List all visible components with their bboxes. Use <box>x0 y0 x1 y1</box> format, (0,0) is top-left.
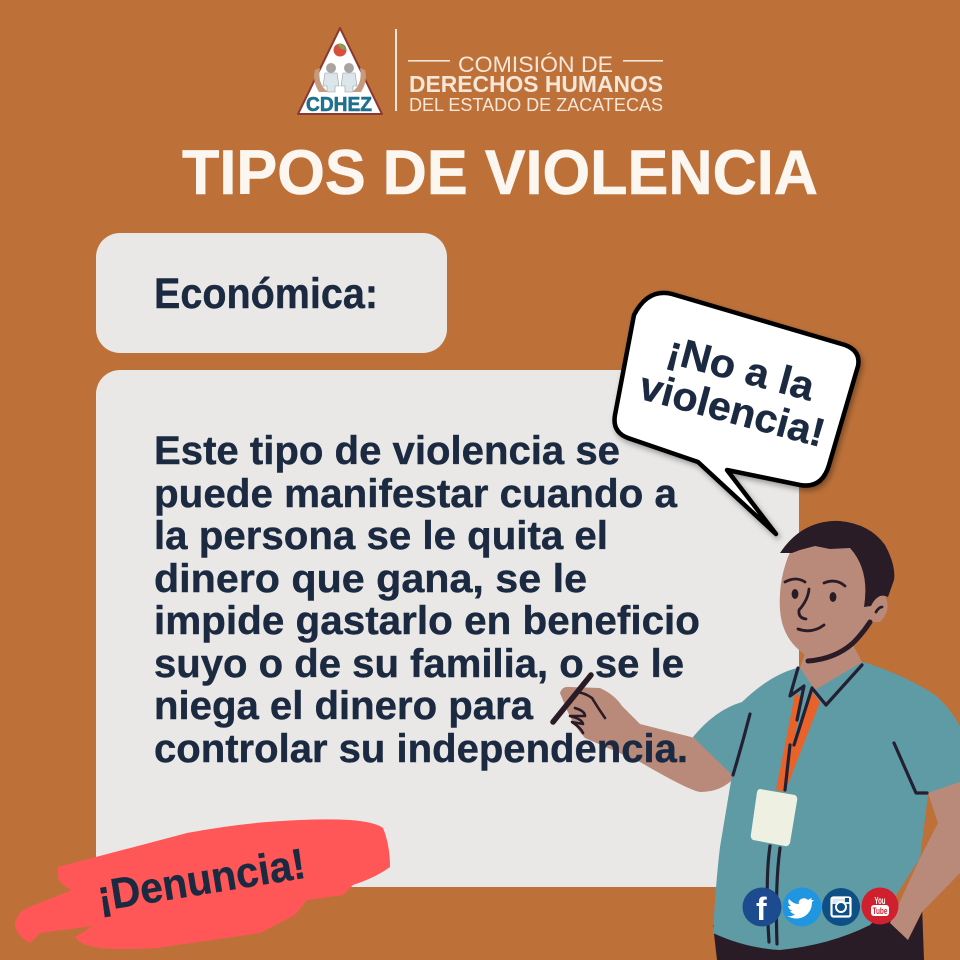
callout: denuncia brush <box>15 819 390 949</box>
heading: Económica: Económica: <box>154 270 378 318</box>
shirt lines <box>733 665 927 944</box>
bubble text: violencia! <box>635 364 830 456</box>
body text: controlar su independencia. <box>154 727 688 771</box>
logo: CDHEZ header <box>298 28 663 116</box>
body text: suyo o de su familia, o se le <box>154 642 684 686</box>
title: TIPOS DE VIOLENCIA <box>182 138 818 208</box>
institution name: DEL ESTADO DE ZACATECAS <box>409 95 663 115</box>
body text: impide gastarlo en beneficio <box>154 599 700 643</box>
institution name: COMISIÓN DE <box>458 52 613 77</box>
hair <box>780 521 894 607</box>
body text: Este tipo de violencia se <box>154 429 620 473</box>
lanyard <box>776 692 820 792</box>
icon: youtube <box>862 888 898 924</box>
face details <box>785 579 882 661</box>
trousers <box>713 905 924 960</box>
icon: youtube: Tube <box>872 906 888 917</box>
body text: niega el dinero para <box>154 684 534 728</box>
icon: facebook <box>742 888 782 927</box>
body text: la persona se le quita el <box>154 514 608 558</box>
institution name: DERECHOS HUMANOS <box>409 71 663 97</box>
body text: puede manifestar cuando a <box>154 472 678 516</box>
left arm and hand <box>560 687 735 792</box>
speech bubble <box>615 293 858 534</box>
bubble shape <box>615 293 858 534</box>
logo triangle: CDHEZ <box>306 94 372 116</box>
brush stroke <box>15 819 390 949</box>
ID badge <box>751 789 797 846</box>
illustration: presenter <box>560 521 960 960</box>
right arm <box>890 780 960 940</box>
icon: instagram <box>822 888 860 926</box>
bubble text: ¡No a la <box>663 328 820 410</box>
neck <box>800 645 862 690</box>
logo triangle <box>298 28 382 116</box>
social icons <box>742 888 898 927</box>
icon: facebook: f <box>756 891 767 927</box>
icon: twitter <box>782 888 822 926</box>
bubble text <box>635 328 830 456</box>
body text: dinero que gana, se le <box>154 557 587 601</box>
panel: description card <box>96 370 799 887</box>
body text <box>154 429 700 771</box>
icon: youtube: You <box>874 896 886 907</box>
face <box>780 540 888 656</box>
icon: hand with pen <box>553 675 605 733</box>
logo divider <box>395 29 397 111</box>
institution name <box>408 52 663 115</box>
shirt <box>693 661 960 950</box>
callout text: ¡Denuncia! <box>94 840 309 921</box>
panel: heading card <box>96 233 447 353</box>
